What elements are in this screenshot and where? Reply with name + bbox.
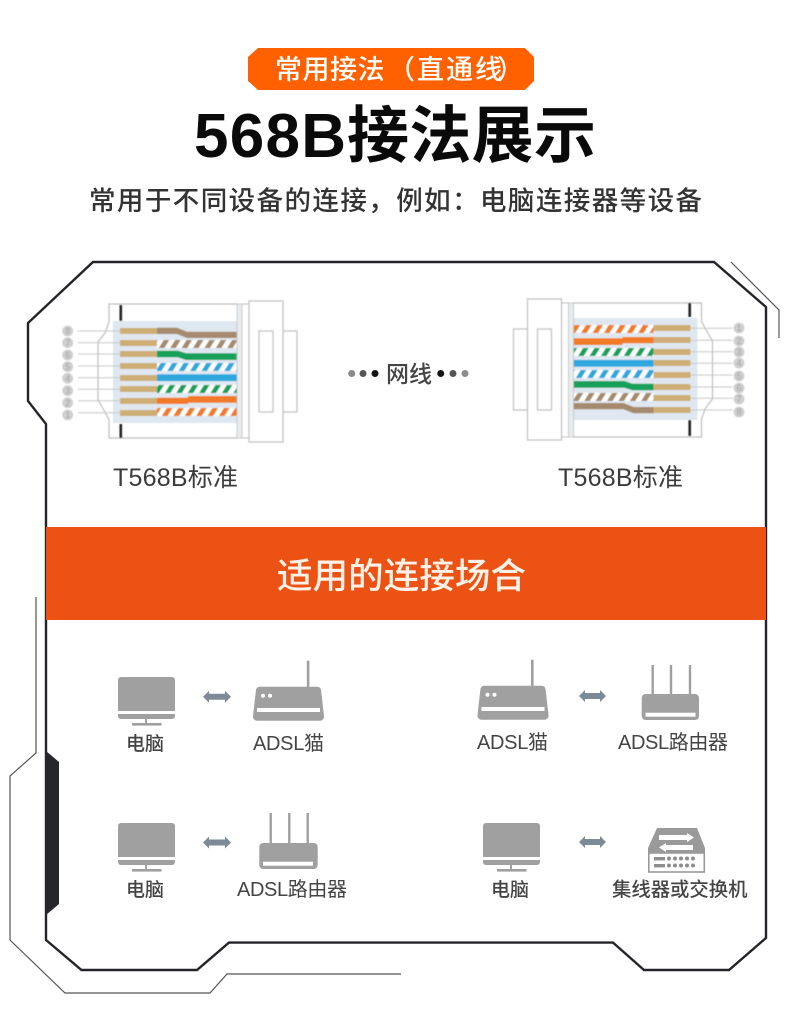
title — [194, 102, 596, 171]
cable label with dots: 网线 — [348, 361, 468, 387]
icon: computer — [118, 677, 175, 726]
orange banner: 适用的连接场合: 适用的连接场合 — [277, 556, 526, 596]
label: ADSL路由器: ADSL路由器 — [618, 731, 728, 754]
left RJ45 connector diagram: 6 — [65, 350, 70, 360]
arrow: two-way — [579, 690, 606, 702]
left RJ45 connector diagram — [62, 301, 297, 442]
label: 集线器或交换机: 集线器或交换机 — [612, 879, 748, 901]
right RJ45 connector diagram: 8 — [736, 407, 742, 417]
label: 电脑: 电脑 — [126, 879, 164, 901]
decorative outer line: top right — [731, 262, 779, 338]
right RJ45 connector diagram: 7 — [736, 394, 742, 404]
right RJ45 connector diagram: 6 — [736, 383, 742, 393]
icon: ADSL router — [259, 813, 318, 869]
title: 568B — [194, 102, 346, 171]
icon: hub or switch — [648, 828, 705, 872]
left RJ45 connector diagram: 2 — [65, 398, 70, 408]
icon: computer — [483, 823, 540, 872]
icon: ADSL modem — [253, 661, 324, 721]
arrow: two-way — [203, 836, 231, 848]
icon: ADSL router — [642, 665, 699, 720]
connection 3: computer to ADSL router — [118, 813, 347, 901]
header tag: 常用接法（直通线）: 常用接法（直通线） — [275, 55, 524, 85]
dark side accent bar — [46, 751, 59, 915]
right RJ45 connector diagram: 3 — [736, 347, 742, 357]
left RJ45 connector diagram: 4 — [65, 374, 70, 384]
decorative outer line: left and bottom — [10, 597, 401, 993]
main panel frame — [28, 262, 766, 970]
connection 4: computer to hub or switch — [483, 823, 748, 901]
left RJ45 connector diagram: 7 — [65, 338, 70, 348]
right RJ45 connector diagram: 1 — [736, 323, 742, 333]
left RJ45 connector diagram: 1 — [65, 410, 70, 420]
icon: computer — [118, 823, 175, 872]
left RJ45 connector diagram: 3 — [65, 386, 70, 396]
label: ADSL猫: ADSL猫 — [477, 731, 548, 754]
right RJ45 connector diagram — [514, 299, 744, 440]
header tag: 常用接法（直通线） — [248, 48, 534, 90]
left RJ45 connector diagram: 5 — [65, 362, 70, 372]
orange banner: 适用的连接场合 — [46, 527, 766, 620]
icon: ADSL modem — [477, 660, 549, 720]
connection 1: computer to ADSL modem — [118, 661, 324, 755]
label: ADSL猫: ADSL猫 — [253, 732, 324, 755]
right RJ45 connector diagram: 4 — [736, 358, 742, 368]
arrow: two-way — [579, 836, 606, 848]
left RJ45 connector diagram: 8 — [65, 326, 70, 336]
right RJ45 connector diagram: 2 — [736, 336, 742, 346]
label: 电脑: 电脑 — [126, 733, 164, 755]
right RJ45 connector diagram: 5 — [736, 371, 742, 381]
cable label with dots: 网线: 网线 — [386, 361, 432, 387]
subtitle: 常用于不同设备的连接，例如：电脑连接器等设备 — [89, 186, 702, 216]
label: ADSL路由器: ADSL路由器 — [237, 878, 347, 901]
title: 接法展示 — [347, 102, 596, 171]
right standard label: T568B标准 — [558, 464, 683, 492]
connection 2: ADSL modem to ADSL router — [477, 660, 728, 754]
left standard label: T568B标准 — [113, 464, 238, 492]
arrow: two-way — [203, 691, 231, 703]
label: 电脑: 电脑 — [491, 879, 529, 901]
